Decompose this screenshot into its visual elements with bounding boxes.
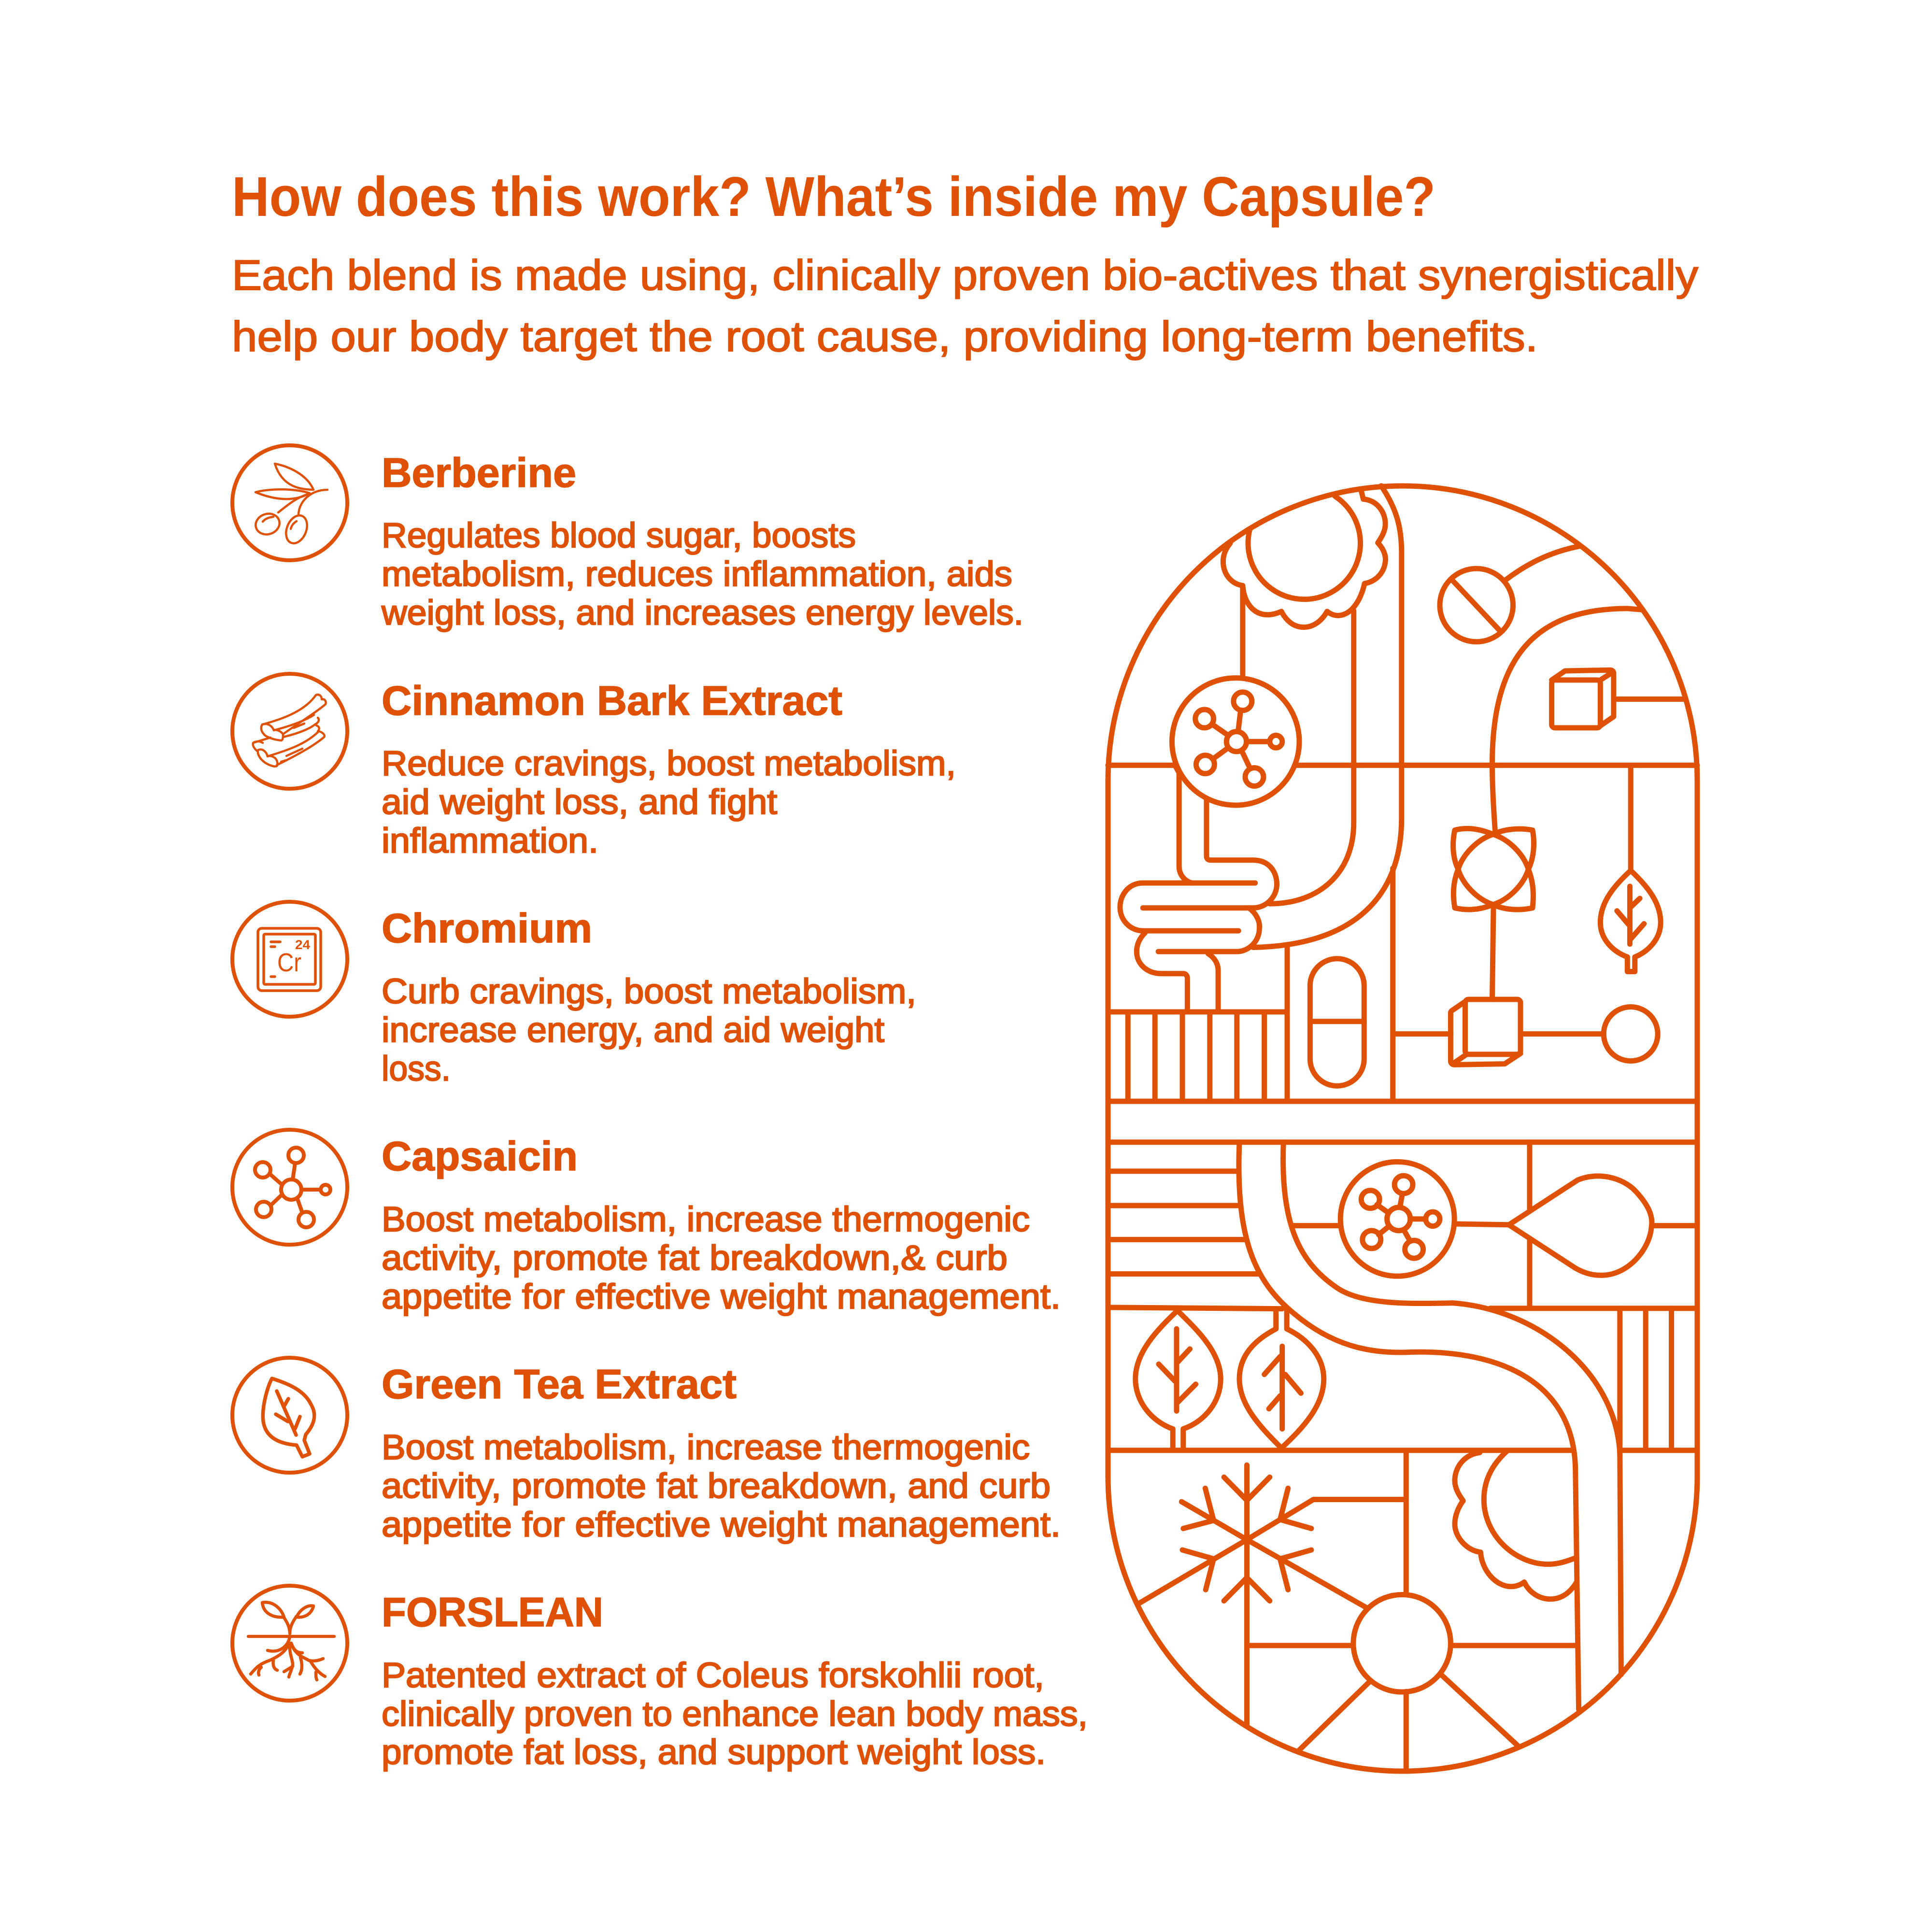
heading: Cinnamon Bark Extract bbox=[382, 678, 842, 724]
description: inflammation. bbox=[382, 822, 598, 860]
description: activity, promote fat breakdown, and curb bbox=[382, 1467, 1051, 1506]
tree crown lower bbox=[1455, 1451, 1577, 1599]
divider lines bbox=[1108, 1142, 1697, 1450]
description: promote fat loss, and support weight loss. bbox=[382, 1733, 1046, 1772]
sun bbox=[1247, 1450, 1577, 1770]
panel: FORSLEAN bbox=[232, 1586, 1088, 1772]
S-curve tube bbox=[1239, 1142, 1621, 1709]
subtitle: help our body target the root cause, providing long-term benefits. bbox=[232, 313, 1538, 360]
capsule pill bbox=[1310, 959, 1364, 1086]
panel: Cinnamon Bark Extract bbox=[232, 674, 956, 860]
leaf inverted bbox=[1239, 1310, 1324, 1448]
tablet disc bbox=[1440, 546, 1579, 642]
description bbox=[382, 1428, 1061, 1544]
description bbox=[381, 516, 1023, 632]
description bbox=[382, 1200, 1061, 1316]
snowflake bbox=[1139, 1465, 1406, 1725]
description: activity, promote fat breakdown,& curb bbox=[382, 1239, 1008, 1278]
description: Patented extract of Coleus forskohlii root, bbox=[382, 1656, 1044, 1695]
description: loss. bbox=[382, 1050, 451, 1088]
panel: Berberine bbox=[232, 445, 1023, 632]
lower cube and node bbox=[1393, 868, 1658, 1101]
icon: sprout with roots bbox=[232, 1586, 347, 1701]
description bbox=[382, 744, 956, 860]
heading: Capsaicin bbox=[382, 1134, 578, 1179]
leaf bbox=[1600, 765, 1661, 971]
description bbox=[382, 972, 916, 1088]
droplet bbox=[1509, 1176, 1697, 1275]
title: How does this work? What’s inside my Capsule? bbox=[232, 165, 1435, 228]
icon: molecule bbox=[232, 1130, 347, 1245]
description: increase energy, and aid weight bbox=[382, 1011, 884, 1050]
heading: FORSLEAN bbox=[382, 1590, 603, 1635]
description: clinically proven to enhance lean body mass, bbox=[382, 1695, 1088, 1733]
digestive tube bbox=[1120, 486, 1402, 1012]
leaf left bbox=[1136, 1310, 1221, 1449]
icon: periodic table tile: 24 bbox=[295, 938, 310, 952]
description: appetite for effective weight management. bbox=[382, 1278, 1061, 1316]
heading: Green Tea Extract bbox=[382, 1362, 737, 1407]
description: appetite for effective weight management. bbox=[382, 1506, 1061, 1544]
icon: tea leaf bbox=[232, 1358, 347, 1473]
upper cube bbox=[1552, 670, 1684, 728]
subtitle: Each blend is made using, clinically proven bio-actives that synergistically bbox=[232, 251, 1698, 299]
panel: Green Tea Extract bbox=[232, 1358, 1061, 1544]
description: Boost metabolism, increase thermogenic bbox=[382, 1200, 1030, 1239]
capsule illustration bbox=[1108, 486, 1697, 1771]
description: Curb cravings, boost metabolism, bbox=[382, 972, 916, 1011]
heading: Berberine bbox=[382, 450, 576, 496]
subtitle bbox=[232, 251, 1698, 360]
heading: Chromium bbox=[382, 906, 592, 952]
capsule outline bbox=[1108, 486, 1697, 1771]
description: Boost metabolism, increase thermogenic bbox=[382, 1428, 1030, 1467]
icon: olive branch bbox=[232, 445, 347, 560]
description: metabolism, reduces inflammation, aids bbox=[382, 555, 1012, 594]
description: Reduce cravings, boost metabolism, bbox=[382, 744, 956, 783]
icon: periodic table tile bbox=[232, 902, 347, 1017]
divider lines bbox=[1108, 765, 1697, 1101]
capsule upper half bbox=[1108, 486, 1697, 1101]
description: aid weight loss, and fight bbox=[382, 783, 777, 822]
tree crown bbox=[1223, 491, 1385, 676]
icon: cinnamon sticks bbox=[232, 674, 347, 789]
molecule in circle bbox=[1293, 1162, 1509, 1276]
capsule lower half bbox=[1108, 1142, 1697, 1770]
description bbox=[382, 1656, 1088, 1772]
description: weight loss, and increases energy levels. bbox=[381, 594, 1023, 632]
panel: Chromium bbox=[232, 902, 916, 1088]
panel: Capsaicin bbox=[232, 1130, 1061, 1316]
icon: periodic table tile: Cr bbox=[277, 948, 301, 977]
atom symbol bbox=[1453, 609, 1642, 999]
molecule in circle bbox=[1172, 678, 1299, 805]
description: Regulates blood sugar, boosts bbox=[382, 516, 856, 555]
